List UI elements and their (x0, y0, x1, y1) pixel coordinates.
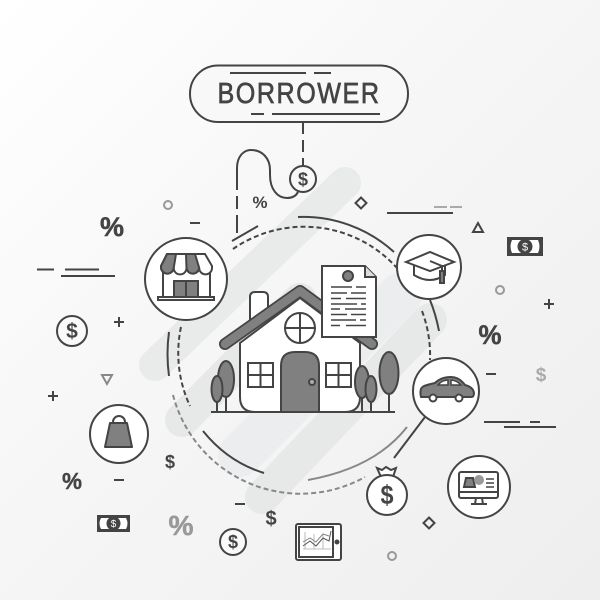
door (281, 352, 319, 412)
round attic window (285, 313, 315, 343)
decorative diagonal stripes (155, 183, 430, 497)
dollar signs (165, 365, 547, 530)
ground line (211, 411, 395, 413)
dollar signs: $ (165, 452, 175, 472)
accent lines (37, 213, 556, 427)
icon: house (211, 291, 398, 412)
percent signs: % (100, 212, 124, 242)
left window (248, 363, 273, 387)
icon: banknote left (97, 515, 130, 532)
icon: graduation cap (397, 235, 461, 299)
title: borrower pill (190, 66, 408, 122)
percent signs: % (252, 193, 268, 212)
icon: car (413, 358, 479, 424)
accent lines gray (434, 206, 462, 208)
icon: loan document (322, 266, 376, 337)
trees (212, 352, 398, 412)
percent signs: % (478, 320, 502, 350)
house walls (240, 298, 360, 412)
small plus and minus marks (48, 223, 554, 504)
chimney (250, 292, 268, 320)
dollar signs: $ (265, 508, 277, 530)
icon: coin on string: $ (298, 170, 308, 190)
connector: dashed line from title to coin (302, 122, 304, 167)
icon: online shop monitor (448, 456, 510, 518)
percent signs: % (168, 510, 194, 541)
icon: bottom coin: $ (228, 532, 238, 552)
connector: curved string (237, 150, 298, 233)
right window (326, 363, 351, 387)
roof (225, 291, 372, 344)
percent signs (62, 193, 502, 541)
dollar signs: $ (536, 365, 547, 386)
icon: money bag (367, 467, 407, 515)
icon: tablet chart (296, 524, 341, 560)
percent signs: % (62, 468, 82, 494)
small diamonds (356, 198, 434, 528)
small gray circles (164, 201, 504, 560)
icon: banknote right: $ (522, 242, 528, 254)
orbit rings around the house (168, 217, 439, 494)
icon: bottom coin (220, 529, 246, 555)
icon: money bag: $ (380, 480, 394, 510)
title: borrower pill: BORROWER (218, 78, 380, 110)
icon: banknote right (507, 237, 543, 256)
icon: coin on string (290, 166, 316, 192)
icon: left coin (57, 316, 87, 346)
icon: storefront (145, 238, 227, 320)
icon: banknote left: $ (111, 519, 117, 530)
icon: left coin: $ (66, 320, 78, 343)
small triangles (102, 223, 483, 384)
icon: shopping bag (90, 405, 148, 463)
